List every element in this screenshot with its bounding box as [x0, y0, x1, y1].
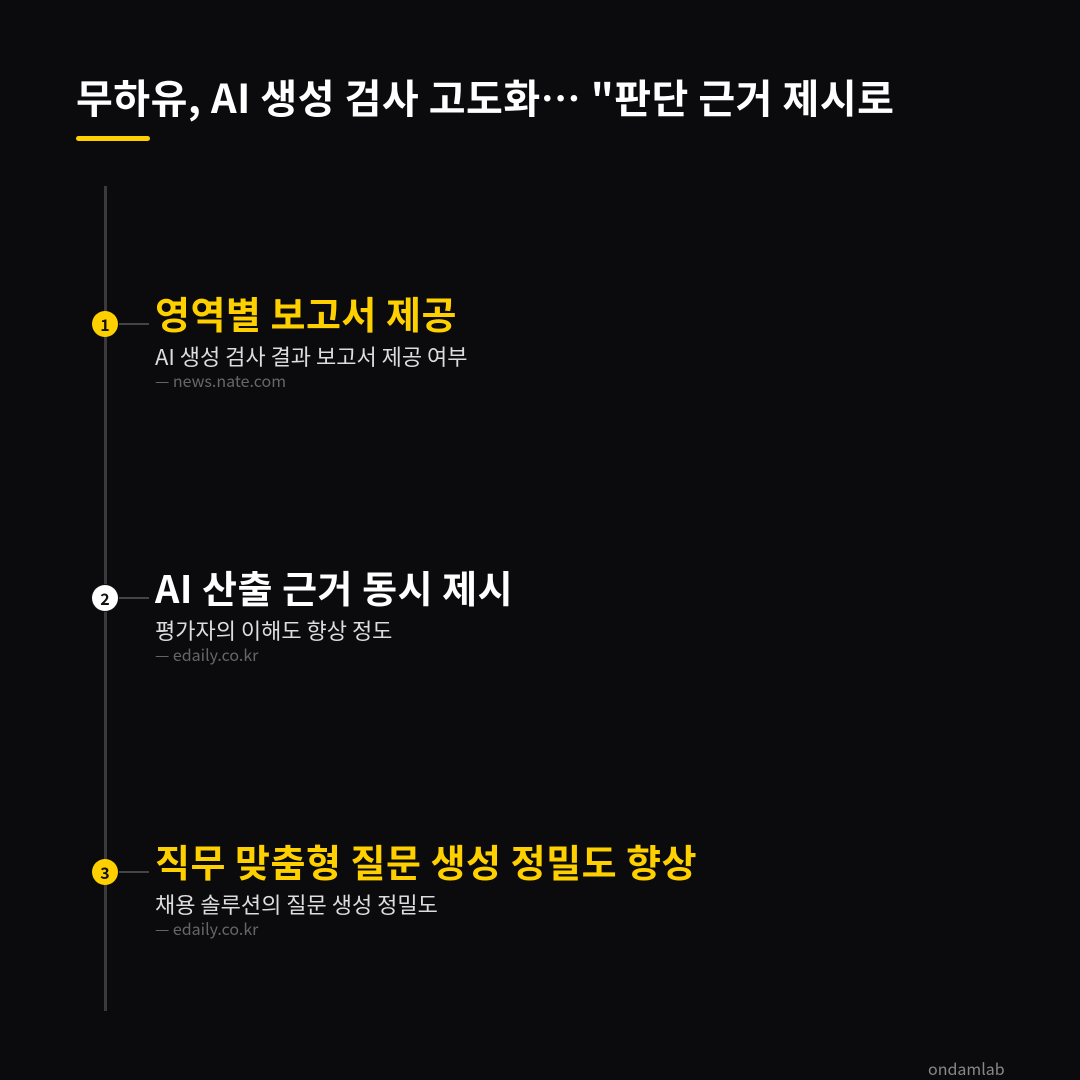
icon: number 1: 1: [100, 312, 110, 336]
icon: number 2: 2: [100, 586, 110, 610]
source 2: — edaily.co.kr: [155, 642, 258, 666]
footer brand: ondamlab: [928, 1056, 1005, 1080]
item 1: [92, 285, 468, 392]
icon: number 3: [92, 859, 118, 885]
connector: [119, 871, 149, 873]
subtext 2: 평가자의 이해도 향상 정도: [155, 614, 392, 646]
item 3: [92, 833, 697, 940]
source 3: — edaily.co.kr: [155, 916, 258, 940]
title: 무하유, AI 생성 검사 고도화… "판단 근거 제시로: [76, 67, 894, 125]
subtext 1: AI 생성 검사 결과 보고서 제공 여부: [155, 340, 468, 372]
subtext 3: 채용 솔루션의 질문 생성 정밀도: [155, 888, 438, 920]
heading 1: 영역별 보고서 제공: [155, 285, 457, 340]
source 1: — news.nate.com: [155, 368, 286, 392]
heading 3: 직무 맞춤형 질문 생성 정밀도 향상: [155, 833, 697, 888]
icon: number 3: 3: [100, 860, 110, 884]
icon: number 2: [92, 585, 118, 611]
connector: [119, 323, 149, 325]
icon: number 1: [92, 311, 118, 337]
connector: [119, 597, 149, 599]
item 2: [92, 559, 513, 666]
heading 2: AI 산출 근거 동시 제시: [155, 559, 513, 614]
title underline: [76, 136, 150, 141]
timeline line: [104, 186, 107, 1011]
